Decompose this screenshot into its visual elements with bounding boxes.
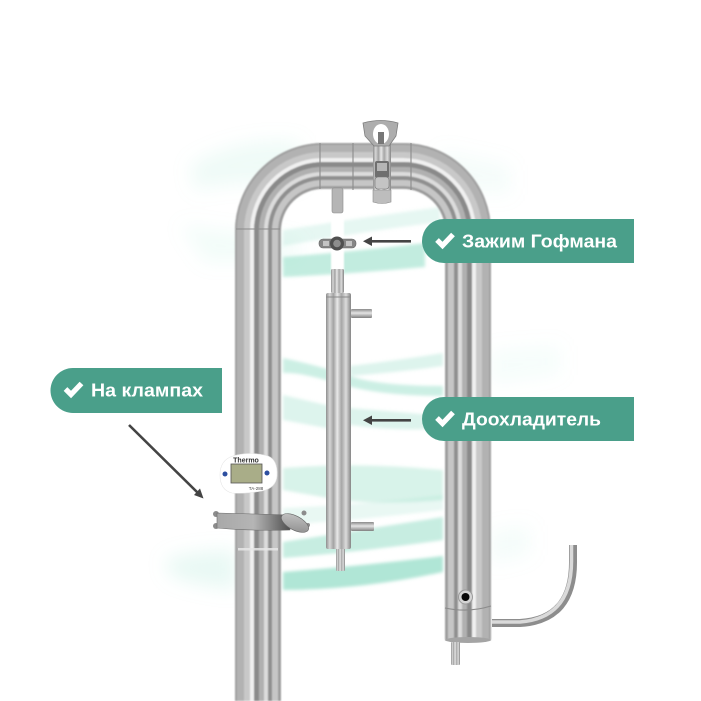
- check icon: [437, 234, 453, 246]
- callout: on clamps: [51, 368, 222, 413]
- bottom nipple: [451, 642, 460, 665]
- main U-shaped steel pipe: [236, 144, 490, 701]
- column clamp: [213, 510, 312, 536]
- callout: aftercooler: [422, 397, 634, 441]
- callout: Hoffman clamp: [422, 219, 634, 263]
- check icon: [437, 412, 453, 424]
- side outlet hole: [458, 590, 472, 604]
- curved drain tube: [492, 545, 573, 623]
- lower hose connector: [331, 269, 344, 293]
- callout: Hoffman clamp: Зажим Гофмана: [462, 232, 618, 252]
- arrow to aftercooler: [363, 416, 411, 425]
- thermometer on the column: [220, 454, 277, 493]
- thermometer on the column: TA-288: [249, 486, 264, 491]
- top clamp with wing nut: [363, 120, 398, 204]
- aftercooler: [326, 293, 374, 571]
- callout: on clamps: На клампах: [91, 380, 203, 400]
- right pipe bottom cap: [445, 637, 491, 643]
- arrow to Hoffman clamp: [363, 236, 411, 246]
- check icon: [66, 384, 82, 394]
- pipe weld seams: [236, 143, 491, 610]
- thermometer on the column: Thermo: [233, 458, 259, 464]
- arrow to column clamp: [129, 425, 204, 498]
- green background swooshes: [165, 141, 560, 590]
- column weld band: [238, 548, 278, 550]
- Hoffman clamp: [319, 236, 356, 250]
- upper hose nipple: [332, 188, 343, 213]
- white gap behind the hose section: [331, 212, 344, 272]
- callout: aftercooler: Доохладитель: [462, 410, 601, 430]
